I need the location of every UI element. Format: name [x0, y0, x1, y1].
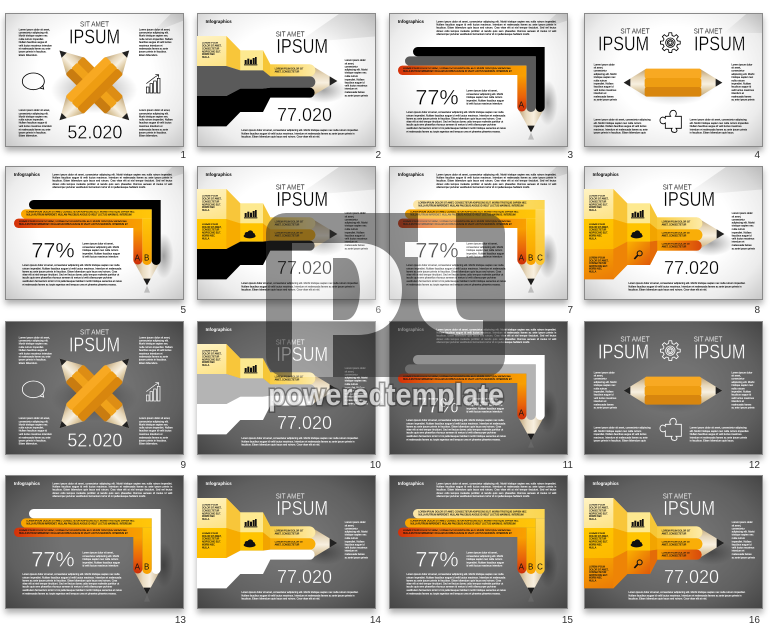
- slide number 15: 15: [562, 615, 573, 626]
- bar A text: LOREM IPSUM DOLOR SIT AMET, CONSECTETUR ADIPISCING ELIT. MORBI TRISTIQUE SAPIEN NEC NULLA RUTRUM IMPERDIET. NULLAM FAUCIBUS AUGUE ID VELIT LUCTUS MAXIMUS. INTERDUM ET: [403, 220, 512, 226]
- band text: LOREM IPSUM DOLOR SIT AMET, CONSECTETUR ADIPISCING ELIT. MORBI NEC NULLA: [202, 42, 222, 58]
- heading: sit amet ipsum: IPSUM: [664, 188, 715, 211]
- slide number 14: 14: [370, 615, 381, 626]
- text block bottom left: Lorem ipsum dolor sit amet, consectetur adipiscing elit. Morbi tristique sapien nec nulla rutrum imperdiet. Nullam faucibus augue id velit luctus maximus interdum et malesuada fames ac ante ipsum primis in faucibus. Etiam bibendum.: [19, 417, 52, 445]
- bottom text: Lorem ipsum dolor sit amet, consectetur adipiscing elit. Morbi tristique sapien nec nulla rutrum imperdiet. Nullam faucibus augue id velit luctus maximus. Interdum et malesuada fames ac ante ipsum primis in faucibus. Etiam bibendum quis lacus sed rutrum. Cras vitae elit at nisl.: [242, 591, 359, 600]
- heading: sit amet ipsum: [276, 337, 328, 366]
- label: infographics: Infographics: [398, 481, 425, 486]
- yellow band: [197, 36, 316, 76]
- slide number 6: 6: [375, 305, 381, 316]
- top text: Lorem ipsum dolor sit amet, consectetur adipiscing elit. Morbi tristique sapien nec nulla rutrum imperdiet. Nullam faucibus augue id velit luctus maximus. Interdum et malesuada fames ac ante ipsum primis in faucibus. Etiam bibendum quis lacus sed rutrum. Cras vitae elit at nisl tempor tincidunt. Sed vel lectus donec odio tempus molestie porttitor ut iaculis quis sem phasellus rhoncus aenean id metus id velit ullamcorper pulvinar vestibulum fermentum tortor id mi pellentesque habitant morbi.: [437, 20, 557, 35]
- value: 52.020: 52.020: [67, 121, 122, 142]
- label: infographics: Infographics: [206, 19, 233, 24]
- icon: bar chart: [244, 57, 258, 65]
- thin band 1 text: LOREM IPSUM DOLOR SIT AMET, CONSECTETUR: [662, 221, 691, 226]
- heading: sit amet ipsum: [69, 19, 120, 48]
- icon: growth chart: [146, 383, 160, 401]
- value: 77%: 77%: [416, 547, 459, 571]
- value: 77.020: 77.020: [277, 257, 332, 278]
- slide number 1: 1: [180, 150, 186, 161]
- orange bar A: [398, 374, 527, 419]
- lower text: Lorem ipsum dolor sit amet, consectetur adipiscing elit. Morbi tristique sapien nec nulla rutrum imperdiet. Nullam faucibus augue id velit luctus maximus. Interdum et malesuada fames ac ante ipsum primis in faucibus. Etiam bibendum quis lacus sed rutrum. Cras vitae elit at nisl tempor tincidunt. Sed vel lectus donec odio tempus molestie porttitor ut iaculis quis sem phasellus rhoncus aenean id metus id velit ullamcorper pulvinar vestibulum fermentum tortor id mi pellentesque habitant morbi tristique senectus et netus et malesuada fames ac turpis egestas sed tempus urna et pharetra pharetra massa.: [407, 419, 506, 441]
- slide number 3: 3: [567, 150, 573, 161]
- letters A B C: C: [537, 562, 543, 571]
- letters A B: [135, 562, 149, 571]
- icon: bar chart: [244, 519, 258, 527]
- white bar: [29, 509, 161, 574]
- bar C text: LOREM IPSUM DOLOR SIT AMET, CONSECTETUR ADIPISCING ELIT. MORBI TRISTIQUE SAPIEN NEC NULLA RUTRUM IMPERDIET. NULLAM FAUCIBUS AUGUE ID VELIT LUCTUS MAXIMUS. INTERDUM: [419, 202, 527, 207]
- letters A B C: C: [537, 253, 543, 262]
- heading: sit amet ipsum: SIT AMET: [80, 19, 109, 28]
- bar C text: LOREM IPSUM DOLOR SIT AMET, CONSECTETUR ADIPISCING ELIT. MORBI TRISTIQUE SAPIEN NEC NULLA RUTRUM IMPERDIET. NULLAM FAUCIBUS AUGUE ID VELIT LUCTUS MAXIMUS. INTERDUM: [419, 511, 527, 516]
- pencil tip: [301, 372, 347, 411]
- icon: puzzle: [660, 110, 682, 132]
- heading left: [598, 335, 650, 363]
- orange band: [584, 550, 702, 588]
- yellow band: [197, 498, 316, 538]
- text block top right: Lorem ipsum dolor sit amet, consectetur adipiscing elit. Morbi tristique sapien nec nulla rutrum imperdiet. Nullam faucibus augue id velit luctus maximus interdum et malesuada fames ac ante ipsum primis in faucibus. Etiam bibendum.: [139, 28, 173, 56]
- icon: puzzle: [660, 418, 682, 440]
- thin band 2 text: LOREM IPSUM DOLOR SIT AMET, CONSECTETUR: [275, 541, 304, 546]
- bar A text: LOREM IPSUM DOLOR SIT AMET, CONSECTETUR ADIPISCING ELIT. MORBI TRISTIQUE SAPIEN NEC NULLA RUTRUM IMPERDIET. NULLAM FAUCIBUS AUGUE ID VELIT LUCTUS MAXIMUS. INTERDUM ET: [403, 529, 512, 535]
- double pencil: [624, 68, 723, 105]
- heading right: [694, 26, 746, 55]
- icon: speech bubble: [22, 381, 44, 398]
- amber bar B: [21, 209, 152, 265]
- slide 15: L pencil ABC, dark: [389, 475, 568, 609]
- light grey bar: [405, 364, 536, 420]
- letters A B C: A: [519, 562, 525, 571]
- label: infographics: Infographics: [206, 481, 233, 486]
- text block top left: Lorem ipsum dolor sit amet, consectetur adipiscing elit. Morbi tristique sapien nec nulla rutrum imperdiet. Nullam faucibus augue id velit luctus maximus interdum et malesuada fames ac ante ipsum primis in faucibus. Etiam bibendum.: [19, 28, 52, 56]
- heading: sit amet ipsum: IPSUM: [277, 497, 328, 520]
- crossed pencils: [51, 41, 138, 129]
- slide 11: L pencil A, dark: [389, 321, 568, 455]
- slide 8: ribbon pencil three colour bands, light: [584, 166, 763, 300]
- value: 77.020: 77.020: [277, 104, 332, 125]
- pencil tip: [688, 217, 734, 256]
- amber band: [197, 219, 316, 249]
- heading: sit amet ipsum: SIT AMET: [276, 491, 305, 500]
- letters A B: B: [144, 562, 149, 571]
- pencil tip: [133, 233, 174, 293]
- slide 1: crossed pencils, light: [5, 13, 184, 147]
- bottom text: Lorem ipsum dolor sit amet, consectetur adipiscing elit. Morbi tristique sapien nec nulla rutrum imperdiet. Nullam faucibus augue id velit luctus maximus. Interdum et malesuada fames ac ante ipsum primis in faucibus. Etiam bibendum quis lacus sed rutrum. Cras vitae elit at nisl.: [242, 282, 359, 291]
- pencil tip: [301, 217, 347, 256]
- value: 77.020: 77.020: [277, 566, 332, 587]
- letters A B C: [519, 562, 543, 571]
- letters A B: B: [144, 253, 149, 262]
- amber band: [584, 219, 703, 249]
- bar A text: LOREM IPSUM DOLOR SIT AMET, CONSECTETUR ADIPISCING ELIT. MORBI TRISTIQUE SAPIEN NEC NULLA RUTRUM IMPERDIET. NULLAM FAUCIBUS AUGUE ID VELIT LUCTUS MAXIMUS. INTERDUM ET: [403, 375, 512, 381]
- thin band 2 text: LOREM IPSUM DOLOR SIT AMET, CONSECTETUR: [662, 541, 691, 546]
- black band: [197, 241, 315, 279]
- pencil tip: [518, 233, 558, 293]
- pencil tip: [301, 526, 347, 565]
- heading: sit amet ipsum: [276, 182, 328, 211]
- pencil tip: [518, 542, 558, 602]
- black bar: [413, 47, 545, 112]
- amber bar B: [21, 518, 152, 574]
- slide number 8: 8: [754, 305, 760, 316]
- watermark logo square with letter cutouts: [266, 213, 505, 377]
- slide number 9: 9: [180, 460, 186, 471]
- thin band 2 text: LOREM IPSUM DOLOR SIT AMET, CONSECTETUR: [275, 232, 304, 237]
- bar A text: LOREM IPSUM DOLOR SIT AMET, CONSECTETUR ADIPISCING ELIT. MORBI TRISTIQUE SAPIEN NEC NULLA RUTRUM IMPERDIET. NULLAM FAUCIBUS AUGUE ID VELIT LUCTUS MAXIMUS. INTERDUM ET: [19, 220, 128, 226]
- white band: [197, 550, 315, 588]
- label: infographics: Infographics: [206, 172, 233, 177]
- heading: sit amet ipsum: [276, 491, 328, 520]
- text block bottom right: Lorem ipsum dolor sit amet, consectetur adipiscing elit. Morbi tristique sapien nec nulla rutrum imperdiet. Nullam faucibus augue id velit luctus maximus interdum et malesuada fames ac ante ipsum primis in faucibus. Etiam bibendum.: [139, 108, 173, 137]
- lower text: Lorem ipsum dolor sit amet, consectetur adipiscing elit. Morbi tristique sapien nec nulla rutrum imperdiet. Nullam faucibus augue id velit luctus maximus. Interdum et malesuada fames ac ante ipsum primis in faucibus. Etiam bibendum quis lacus sed rutrum. Cras vitae elit at nisl tempor tincidunt. Sed vel lectus donec odio tempus molestie porttitor ut iaculis quis sem phasellus rhoncus aenean id metus id velit ullamcorper pulvinar vestibulum fermentum tortor id mi pellentesque habitant morbi tristique senectus et netus et malesuada fames ac turpis egestas sed tempus urna et pharetra pharetra massa.: [407, 264, 506, 286]
- heading: sit amet ipsum: [69, 327, 120, 357]
- bar B text: LOREM IPSUM DOLOR SIT AMET, CONSECTETUR ADIPISCING ELIT. MORBI TRISTIQUE SAPIEN NEC NULLA RUTRUM IMPERDIET. NULLAM FAUCIBUS AUGUE ID VELIT LUCTUS MAXIMUS. INTERDUM: [26, 520, 135, 525]
- heading: sit amet ipsum: SIT AMET: [80, 327, 109, 336]
- white band: [197, 396, 315, 434]
- icon: cloud: [631, 539, 643, 547]
- value: 77%: 77%: [416, 393, 459, 417]
- lower text: Lorem ipsum dolor sit amet, consectetur adipiscing elit. Morbi tristique sapien nec nulla rutrum imperdiet. Nullam faucibus augue id velit luctus maximus. Interdum et malesuada fames ac ante ipsum primis in faucibus. Etiam bibendum quis lacus sed rutrum. Cras vitae elit at nisl tempor tincidunt. Sed vel lectus donec odio tempus molestie porttitor ut iaculis quis sem phasellus rhoncus aenean id metus id velit ullamcorper pulvinar vestibulum fermentum tortor id mi pellentesque habitant morbi tristique senectus et netus et malesuada fames ac turpis egestas sed tempus urna et pharetra pharetra massa.: [407, 573, 506, 595]
- letters A B C: [519, 253, 543, 262]
- value: 77%: 77%: [416, 85, 459, 109]
- thin band 3 text: LOREM IPSUM DOLOR SIT AMET, CONSECTETUR: [662, 552, 691, 557]
- orange bar A: [398, 65, 527, 111]
- band 2 text: LOREM IPSUM DOLOR SIT AMET, CONSECTETUR ADIPISCING ELIT. MORBI NEC NULLA: [202, 532, 222, 549]
- heading: sit amet ipsum: IPSUM: [277, 343, 328, 366]
- slide 12: double pencil, dark: [584, 321, 763, 455]
- label: infographics: Infographics: [14, 172, 41, 177]
- amber band: [584, 528, 703, 558]
- slide 6: ribbon pencil two colour bands, light: [197, 166, 376, 300]
- bar B text: LOREM IPSUM DOLOR SIT AMET, CONSECTETUR ADIPISCING ELIT. MORBI TRISTIQUE SAPIEN NEC NULLA RUTRUM IMPERDIET. NULLAM FAUCIBUS AUGUE ID VELIT LUCTUS MAXIMUS. INTERDUM: [411, 211, 519, 216]
- slide number 11: 11: [563, 460, 573, 471]
- slide 4: double pencil, light: [584, 13, 763, 147]
- letters A B: [135, 253, 149, 262]
- icon: speech bubble: [22, 73, 44, 89]
- grey bar: [405, 56, 536, 112]
- amber bar B: [405, 518, 536, 574]
- heading left: [598, 26, 650, 55]
- pencil tip: [518, 388, 558, 448]
- band 2 text: LOREM IPSUM DOLOR SIT AMET, CONSECTETUR ADIPISCING ELIT. MORBI NEC NULLA: [589, 532, 609, 549]
- light grey band: [197, 374, 316, 404]
- heading left: IPSUM: [598, 340, 649, 363]
- thin band 3 text: LOREM IPSUM DOLOR SIT AMET, CONSECTETUR: [662, 243, 691, 248]
- orange bar A: [14, 219, 142, 264]
- label: infographics: Infographics: [398, 19, 425, 24]
- slide number 5: 5: [180, 305, 186, 316]
- letter A: A: [519, 100, 525, 109]
- label: infographics: Infographics: [398, 172, 425, 177]
- slide 14: ribbon pencil two colour bands, dark: [197, 475, 376, 609]
- label: infographics: Infographics: [398, 327, 425, 332]
- band text: LOREM IPSUM DOLOR SIT AMET, CONSECTETUR ADIPISCING ELIT. MORBI NEC NULLA: [202, 350, 222, 367]
- slide number 4: 4: [754, 150, 760, 161]
- yellow band: [197, 189, 316, 229]
- icon: gear: [661, 32, 681, 52]
- bottom text: Lorem ipsum dolor sit amet, consectetur adipiscing elit. Morbi tristique sapien nec nulla rutrum imperdiet. Nullam faucibus augue id velit luctus maximus. Interdum et malesuada fames ac ante ipsum primis in faucibus. Etiam bibendum quis lacus sed rutrum. Cras vitae elit at nisl.: [242, 437, 359, 446]
- thin band 1 text: LOREM IPSUM DOLOR SIT AMET, CONSECTETUR: [275, 221, 304, 226]
- letters A B: A: [135, 562, 141, 571]
- value: 77%: 77%: [416, 238, 459, 262]
- heading: sit amet ipsum: [663, 182, 715, 211]
- grey band: [197, 66, 316, 96]
- top text: Lorem ipsum dolor sit amet, consectetur adipiscing elit. Morbi tristique sapien nec nulla rutrum imperdiet. Nullam faucibus augue id velit luctus maximus. Interdum et malesuada fames ac ante ipsum primis in faucibus. Etiam bibendum quis lacus sed rutrum. Cras vitae elit at nisl tempor tincidunt. Sed vel lectus donec odio tempus molestie porttitor ut iaculis quis sem phasellus rhoncus aenean id metus id velit ullamcorper pulvinar vestibulum fermentum tortor id mi pellentesque habitant morbi.: [437, 173, 557, 189]
- heading: sit amet ipsum: IPSUM: [277, 188, 328, 211]
- heading right: IPSUM: [694, 340, 746, 363]
- watermark wordmark: poweredtemplate: [268, 377, 504, 412]
- heading right: SIT AMET: [694, 335, 723, 344]
- double pencil: [624, 377, 723, 413]
- slide 2: ribbon pencil one yellow band, light: [197, 13, 376, 147]
- text block bottom right: Lorem ipsum dolor sit amet, consectetur adipiscing elit. Morbi tristique sapien nec nulla rutrum imperdiet. Nullam faucibus augue id velit luctus maximus interdum et malesuada fames ac ante ipsum primis in faucibus. Etiam bibendum.: [139, 417, 173, 445]
- label: infographics: Infographics: [206, 327, 233, 332]
- band 1 text: LOREM IPSUM DOLOR SIT AMET, CONSECTETUR ADIPISCING ELIT. MORBI NEC NULLA: [202, 504, 222, 521]
- slide 10: ribbon pencil one yellow band, dark: [197, 321, 376, 455]
- slide 13: L pencil AB, dark: [5, 475, 184, 609]
- value: 77.020: 77.020: [664, 257, 719, 278]
- slide 9: crossed pencils, dark: [5, 321, 184, 455]
- icon: bar chart: [631, 519, 645, 527]
- value: 77.020: 77.020: [277, 412, 332, 433]
- value: 77%: 77%: [31, 238, 75, 262]
- heading: sit amet ipsum: SIT AMET: [663, 182, 692, 191]
- icon: bar chart: [631, 210, 645, 218]
- orange bar A: [398, 219, 527, 264]
- icon: bar chart: [244, 365, 258, 373]
- heading: sit amet ipsum: SIT AMET: [276, 29, 305, 38]
- icon: cloud: [244, 539, 256, 547]
- slide 3: L pencil A, light: [389, 13, 568, 147]
- heading: sit amet ipsum: SIT AMET: [276, 337, 305, 346]
- top text: Lorem ipsum dolor sit amet, consectetur adipiscing elit. Morbi tristique sapien nec nulla rutrum imperdiet. Nullam faucibus augue id velit luctus maximus. Interdum et malesuada fames ac ante ipsum primis in faucibus. Etiam bibendum quis lacus sed rutrum. Cras vitae elit at nisl tempor tincidunt. Sed vel lectus donec odio tempus molestie porttitor ut iaculis quis sem phasellus rhoncus aenean id metus id velit ullamcorper pulvinar vestibulum fermentum tortor id mi pellentesque habitant morbi.: [52, 482, 172, 498]
- top text: Lorem ipsum dolor sit amet, consectetur adipiscing elit. Morbi tristique sapien nec nulla rutrum imperdiet. Nullam faucibus augue id velit luctus maximus. Interdum et malesuada fames ac ante ipsum primis in faucibus. Etiam bibendum quis lacus sed rutrum. Cras vitae elit at nisl tempor tincidunt. Sed vel lectus donec odio tempus molestie porttitor ut iaculis quis sem phasellus rhoncus aenean id metus id velit ullamcorper pulvinar vestibulum fermentum tortor id mi pellentesque habitant morbi.: [437, 328, 557, 344]
- heading right: IPSUM: [694, 32, 746, 55]
- thin band 1 text: LOREM IPSUM DOLOR SIT AMET, CONSECTETUR: [662, 530, 691, 535]
- bottom text: Lorem ipsum dolor sit amet, consectetur adipiscing elit. Morbi tristique sapien nec nulla rutrum imperdiet. Nullam faucibus augue id velit luctus maximus. Interdum et malesuada fames ac ante ipsum primis in faucibus. Etiam bibendum quis lacus sed rutrum. Cras vitae elit at nisl.: [629, 282, 746, 291]
- icon: bar chart: [244, 210, 258, 218]
- label: infographics: Infographics: [593, 481, 620, 486]
- heading: sit amet ipsum: IPSUM: [664, 497, 715, 520]
- yellow band: [584, 189, 703, 229]
- heading: sit amet ipsum: IPSUM: [69, 334, 120, 357]
- heading left: SIT AMET: [621, 335, 650, 344]
- pencil tip: [301, 64, 347, 103]
- bottom text: Lorem ipsum dolor sit amet, consectetur adipiscing elit. Morbi tristique sapien nec nulla rutrum imperdiet. Nullam faucibus augue id velit luctus maximus. Interdum et malesuada fames ac ante ipsum primis in faucibus. Etiam bibendum quis lacus sed rutrum. Cras vitae elit at nisl.: [629, 591, 746, 600]
- band 2 text: LOREM IPSUM DOLOR SIT AMET, CONSECTETUR ADIPISCING ELIT. MORBI NEC NULLA: [589, 223, 609, 240]
- band 1 text: LOREM IPSUM DOLOR SIT AMET, CONSECTETUR ADIPISCING ELIT. MORBI NEC NULLA: [589, 504, 609, 521]
- value: 77.020: 77.020: [664, 566, 719, 587]
- heading: sit amet ipsum: SIT AMET: [663, 491, 692, 500]
- bar A text: LOREM IPSUM DOLOR SIT AMET, CONSECTETUR ADIPISCING ELIT. MORBI TRISTIQUE SAPIEN NEC NULLA RUTRUM IMPERDIET. NULLAM FAUCIBUS AUGUE ID VELIT LUCTUS MAXIMUS. INTERDUM ET: [19, 529, 128, 535]
- text block top right: Lorem ipsum dolor sit amet, consectetur adipiscing elit. Morbi tristique sapien nec nulla rutrum imperdiet. Nullam faucibus augue id velit luctus maximus interdum et malesuada fames ac ante ipsum primis in faucibus. Etiam bibendum.: [139, 336, 173, 365]
- bar A text: LOREM IPSUM DOLOR SIT AMET, CONSECTETUR ADIPISCING ELIT. MORBI TRISTIQUE SAPIEN NEC NULLA RUTRUM IMPERDIET. NULLAM FAUCIBUS AUGUE ID VELIT LUCTUS MAXIMUS. INTERDUM ET: [403, 67, 512, 72]
- bar B text: LOREM IPSUM DOLOR SIT AMET, CONSECTETUR ADIPISCING ELIT. MORBI TRISTIQUE SAPIEN NEC NULLA RUTRUM IMPERDIET. NULLAM FAUCIBUS AUGUE ID VELIT LUCTUS MAXIMUS. INTERDUM: [411, 520, 519, 525]
- heading: sit amet ipsum: IPSUM: [69, 25, 120, 48]
- value: 77%: 77%: [31, 547, 75, 571]
- slide 16: ribbon pencil three colour bands, dark: [584, 475, 763, 609]
- heading: sit amet ipsum: [276, 29, 328, 58]
- top text: Lorem ipsum dolor sit amet, consectetur adipiscing elit. Morbi tristique sapien nec nulla rutrum imperdiet. Nullam faucibus augue id velit luctus maximus. Interdum et malesuada fames ac ante ipsum primis in faucibus. Etiam bibendum quis lacus sed rutrum. Cras vitae elit at nisl tempor tincidunt. Sed vel lectus donec odio tempus molestie porttitor ut iaculis quis sem phasellus rhoncus aenean id metus id velit ullamcorper pulvinar vestibulum fermentum tortor id mi pellentesque habitant morbi.: [52, 173, 172, 189]
- amber band: [197, 528, 316, 558]
- orange bar A: [14, 528, 142, 573]
- heading right: [694, 335, 746, 363]
- yellow band: [584, 498, 703, 538]
- label: infographics: Infographics: [593, 172, 620, 177]
- white bar: [413, 355, 545, 420]
- slide number 2: 2: [375, 150, 381, 161]
- top text: Lorem ipsum dolor sit amet, consectetur adipiscing elit. Morbi tristique sapien nec nulla rutrum imperdiet. Nullam faucibus augue id velit luctus maximus. Interdum et malesuada fames ac ante ipsum primis in faucibus. Etiam bibendum quis lacus sed rutrum. Cras vitae elit at nisl tempor tincidunt. Sed vel lectus donec odio tempus molestie porttitor ut iaculis quis sem phasellus rhoncus aenean id metus id velit ullamcorper pulvinar vestibulum fermentum tortor id mi pellentesque habitant morbi.: [437, 482, 557, 498]
- heading right: SIT AMET: [694, 26, 723, 35]
- slide number 7: 7: [567, 305, 573, 316]
- heading: sit amet ipsum: [663, 491, 715, 520]
- band 3 text: LOREM IPSUM DOLOR SIT AMET, CONSECTETUR ADIPISCING ELIT. MORBI NEC NULLA: [589, 257, 609, 273]
- lower text: Lorem ipsum dolor sit amet, consectetur adipiscing elit. Morbi tristique sapien nec nulla rutrum imperdiet. Nullam faucibus augue id velit luctus maximus. Interdum et malesuada fames ac ante ipsum primis in faucibus. Etiam bibendum quis lacus sed rutrum. Cras vitae elit at nisl tempor tincidunt. Sed vel lectus donec odio tempus molestie porttitor ut iaculis quis sem phasellus rhoncus aenean id metus id velit ullamcorper pulvinar vestibulum fermentum tortor id mi pellentesque habitant morbi tristique senectus et netus et malesuada fames ac turpis egestas sed tempus urna et pharetra pharetra massa.: [407, 110, 506, 133]
- icon: gear: [661, 341, 681, 361]
- orange band: [584, 241, 702, 279]
- pencil tip: [133, 542, 174, 602]
- thin band text: LOREM IPSUM DOLOR SIT AMET, CONSECTETUR: [275, 67, 304, 73]
- value: 52.020: 52.020: [67, 430, 122, 451]
- pencil tip: [518, 80, 558, 139]
- yellow bar C: [413, 200, 545, 265]
- yellow band: [197, 344, 316, 384]
- heading left: SIT AMET: [621, 26, 650, 35]
- bottom right text: Lorem ipsum dolor sit amet, consectetur adipiscing elit. Morbi tristique sapien nec nulla rutrum imperdiet. Nullam faucibus augue id velit luctus maximus. Interdum et malesuada fames ac ante ipsum primis in faucibus. Etiam bibendum quis lacus.: [690, 426, 749, 442]
- band 3 text: LOREM IPSUM DOLOR SIT AMET, CONSECTETUR ADIPISCING ELIT. MORBI NEC NULLA: [589, 566, 609, 582]
- icon: magnifier: [635, 560, 642, 568]
- slide 7: L pencil ABC, light: [389, 166, 568, 300]
- lower text: Lorem ipsum dolor sit amet, consectetur adipiscing elit. Morbi tristique sapien nec nulla rutrum imperdiet. Nullam faucibus augue id velit luctus maximus. Interdum et malesuada fames ac ante ipsum primis in faucibus. Etiam bibendum quis lacus sed rutrum. Cras vitae elit at nisl tempor tincidunt. Sed vel lectus donec odio tempus molestie porttitor ut iaculis quis sem phasellus rhoncus aenean id metus id velit ullamcorper pulvinar vestibulum fermentum tortor id mi pellentesque habitant morbi tristique senectus et netus et malesuada fames ac turpis egestas sed tempus urna et pharetra pharetra massa.: [22, 573, 122, 595]
- heading left: IPSUM: [598, 32, 649, 55]
- thin band 2 text: LOREM IPSUM DOLOR SIT AMET, CONSECTETUR: [662, 232, 691, 237]
- black band: [197, 87, 315, 126]
- lower text: Lorem ipsum dolor sit amet, consectetur adipiscing elit. Morbi tristique sapien nec nulla rutrum imperdiet. Nullam faucibus augue id velit luctus maximus. Interdum et malesuada fames ac ante ipsum primis in faucibus. Etiam bibendum quis lacus sed rutrum. Cras vitae elit at nisl tempor tincidunt. Sed vel lectus donec odio tempus molestie porttitor ut iaculis quis sem phasellus rhoncus aenean id metus id velit ullamcorper pulvinar vestibulum fermentum tortor id mi pellentesque habitant morbi tristique senectus et netus et malesuada fames ac turpis egestas sed tempus urna et pharetra pharetra massa.: [22, 264, 122, 286]
- slide 5: L pencil AB, light: [5, 166, 184, 300]
- letter A: A: [519, 408, 525, 417]
- text block top left: Lorem ipsum dolor sit amet, consectetur adipiscing elit. Morbi tristique sapien nec nulla rutrum imperdiet. Nullam faucibus augue id velit luctus maximus interdum et malesuada fames ac ante ipsum primis in faucibus. Etiam bibendum.: [19, 336, 52, 365]
- slide number 16: 16: [749, 615, 760, 626]
- text block bottom left: Lorem ipsum dolor sit amet, consectetur adipiscing elit. Morbi tristique sapien nec nulla rutrum imperdiet. Nullam faucibus augue id velit luctus maximus interdum et malesuada fames ac ante ipsum primis in faucibus. Etiam bibendum.: [19, 108, 52, 137]
- crossed pencils: [51, 350, 138, 437]
- bar B text: LOREM IPSUM DOLOR SIT AMET, CONSECTETUR ADIPISCING ELIT. MORBI TRISTIQUE SAPIEN NEC NULLA RUTRUM IMPERDIET. NULLAM FAUCIBUS AUGUE ID VELIT LUCTUS MAXIMUS. INTERDUM: [26, 211, 135, 216]
- slide number 12: 12: [749, 460, 760, 471]
- band 1 text: LOREM IPSUM DOLOR SIT AMET, CONSECTETUR ADIPISCING ELIT. MORBI NEC NULLA: [589, 195, 609, 212]
- icon: cloud: [244, 230, 256, 238]
- bottom text: Lorem ipsum dolor sit amet, consectetur adipiscing elit. Morbi tristique sapien nec nulla rutrum imperdiet. Nullam faucibus augue id velit luctus maximus. Interdum et malesuada fames ac ante ipsum primis in faucibus. Etiam bibendum quis lacus sed rutrum. Cras vitae elit at nisl.: [242, 128, 359, 138]
- letters A B C: B: [528, 562, 534, 571]
- letters A B C: A: [519, 253, 525, 262]
- slide number 13: 13: [175, 615, 186, 626]
- label: infographics: Infographics: [14, 481, 41, 486]
- icon: growth chart: [146, 74, 160, 93]
- amber bar B: [405, 209, 536, 265]
- icon: magnifier: [635, 251, 642, 259]
- band 1 text: LOREM IPSUM DOLOR SIT AMET, CONSECTETUR ADIPISCING ELIT. MORBI NEC NULLA: [202, 195, 222, 212]
- letters A B: A: [135, 253, 141, 262]
- heading: sit amet ipsum: IPSUM: [277, 35, 328, 58]
- letters A B C: B: [528, 253, 534, 262]
- icon: cloud: [631, 230, 643, 238]
- band 2 text: LOREM IPSUM DOLOR SIT AMET, CONSECTETUR ADIPISCING ELIT. MORBI NEC NULLA: [202, 223, 222, 240]
- thin band 1 text: LOREM IPSUM DOLOR SIT AMET, CONSECTETUR: [275, 530, 304, 535]
- orange bar A: [398, 528, 527, 573]
- slide number 10: 10: [370, 460, 381, 471]
- yellow bar C: [413, 509, 545, 574]
- black bar: [29, 200, 161, 265]
- heading: sit amet ipsum: SIT AMET: [276, 182, 305, 191]
- thin band text: LOREM IPSUM DOLOR SIT AMET, CONSECTETUR: [275, 376, 304, 381]
- pencil tip: [688, 526, 734, 565]
- bottom right text: Lorem ipsum dolor sit amet, consectetur adipiscing elit. Morbi tristique sapien nec nulla rutrum imperdiet. Nullam faucibus augue id velit luctus maximus. Interdum et malesuada fames ac ante ipsum primis in faucibus. Etiam bibendum quis lacus.: [690, 118, 749, 134]
